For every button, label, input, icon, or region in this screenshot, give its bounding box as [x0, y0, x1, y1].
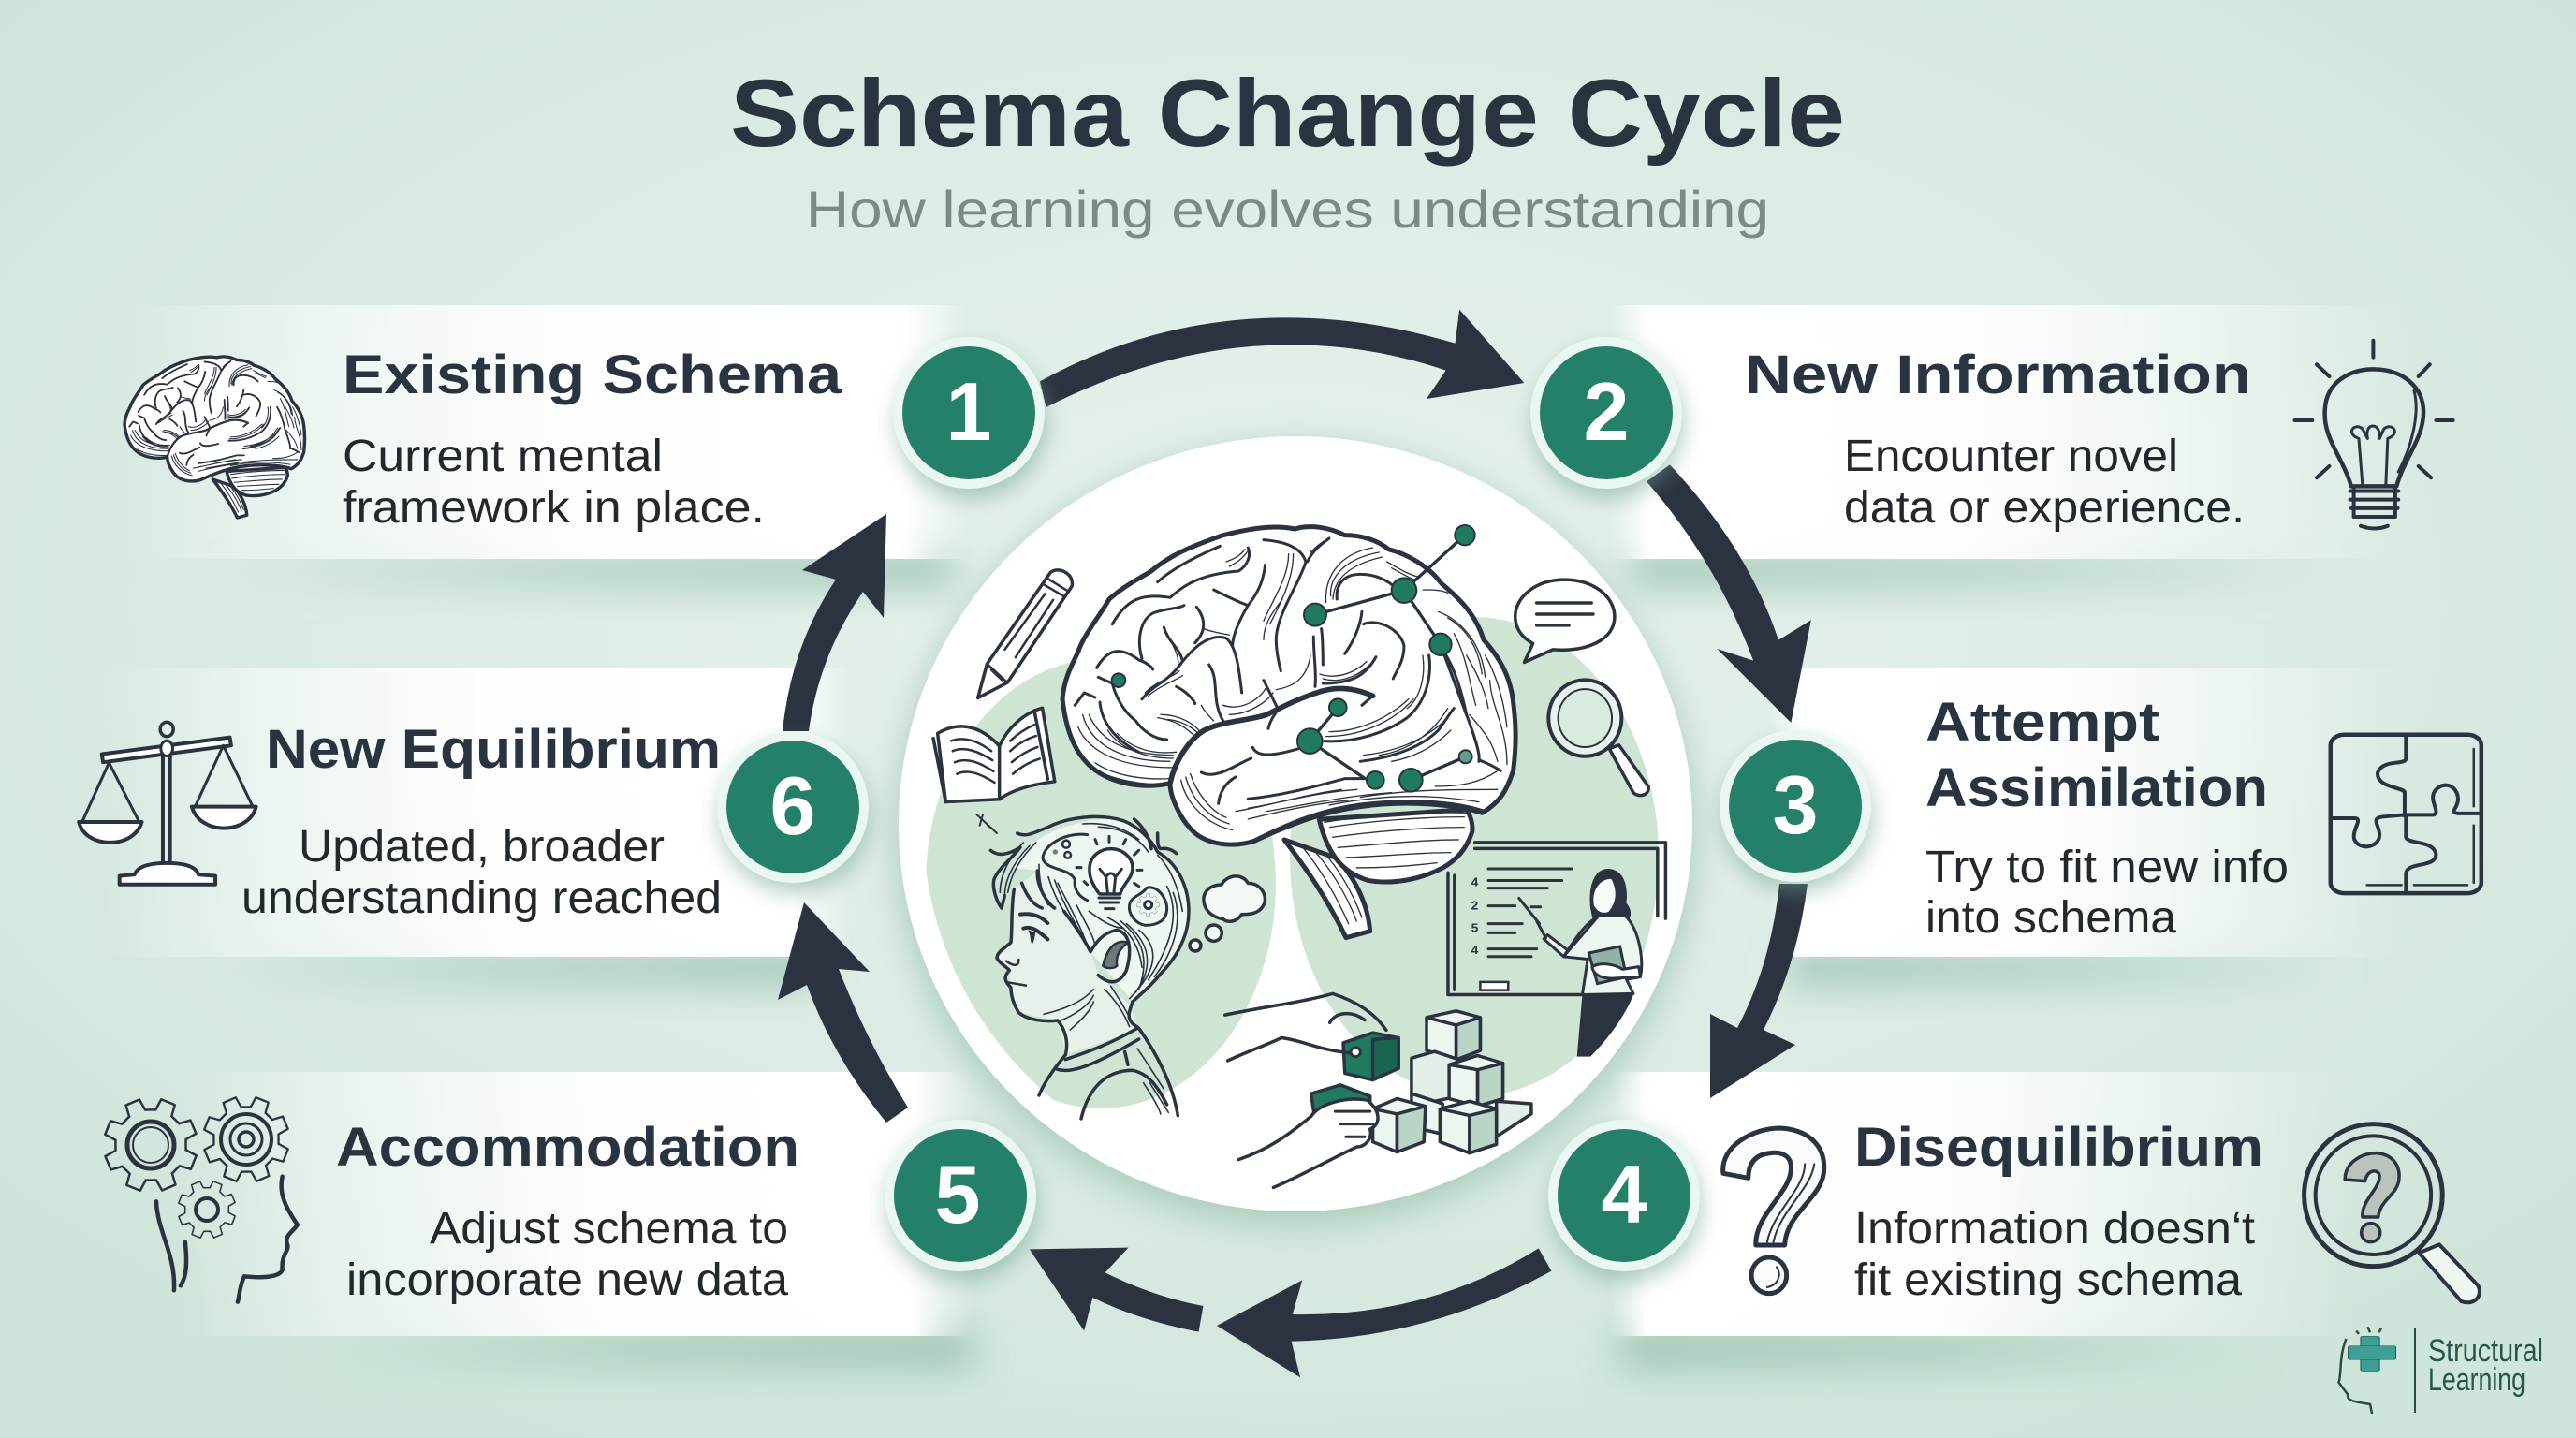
panel text: attempt assimilation: into schema — [1925, 893, 2176, 943]
panel: existing schema background — [122, 305, 969, 559]
icon: magnifier with question mark — [2305, 1124, 2480, 1302]
panel text: disequilibrium: Information doesn‘t — [1854, 1204, 2255, 1254]
panel shadows — [215, 552, 2349, 1369]
logo divider — [2414, 1328, 2416, 1413]
icon: balance scales — [79, 722, 256, 885]
logo: Structural Learning — [2338, 1327, 2543, 1414]
block stack — [1373, 1011, 1531, 1153]
icon: head with gears — [91, 1084, 301, 1302]
badge 3 — [1720, 730, 1872, 891]
panel text: attempt assimilation: Assimilation — [1925, 757, 2268, 818]
panel text: new equilibrium: New Equilibrium — [266, 719, 721, 780]
arrow: step 4 toward step 5, second segment — [1030, 1248, 1203, 1332]
illustration: teacher at whiteboard: 5 — [1471, 921, 1479, 934]
green background blobs — [926, 617, 1659, 1108]
badge 3: 3 — [1773, 758, 1818, 851]
central illustration circle — [895, 436, 1696, 1226]
hands — [1225, 993, 1386, 1061]
icon: magnifier — [1548, 680, 1648, 796]
main brain with network nodes — [1062, 525, 1515, 938]
logo wordmark: Structural — [2428, 1333, 2543, 1369]
arrow: step 6 to step 1 — [783, 514, 886, 731]
logo mark — [2338, 1327, 2396, 1414]
arrow: step 5 to step 6 — [778, 902, 908, 1123]
panel text: accommodation: Accommodation — [336, 1117, 799, 1178]
panel text: new information: data or experience. — [1844, 483, 2245, 533]
icon: thought cloud — [1190, 876, 1265, 951]
panel: attempt assimilation background — [1769, 668, 2406, 957]
panel text: attempt assimilation: Attempt — [1925, 692, 2159, 753]
panel text: new information: Encounter novel — [1844, 432, 2178, 481]
panel text: accommodation — [336, 1117, 799, 1305]
panel text: existing schema: Current mental — [343, 432, 663, 481]
badge 5: 5 — [935, 1148, 980, 1240]
panel text: disequilibrium: fit existing schema — [1854, 1255, 2242, 1305]
panel: accommodation background — [178, 1072, 973, 1336]
panel: new equilibrium background — [103, 668, 852, 957]
neural network nodes — [1112, 525, 1475, 792]
panel text: new equilibrium: understanding reached — [242, 873, 722, 923]
panel text: new equilibrium — [242, 719, 722, 923]
badge 5 — [885, 1120, 1037, 1281]
panel: new information background — [1610, 305, 2415, 559]
arrow: step 1 to step 2 — [1040, 310, 1524, 407]
panel text: new information — [1745, 345, 2251, 533]
arrow: step 3 to step 4 — [1710, 884, 1808, 1098]
badge 1: 1 — [946, 365, 991, 458]
illustration: teacher at whiteboard: 2 — [1471, 899, 1478, 912]
badge 6: 6 — [770, 759, 815, 852]
panel: disequilibrium background — [1610, 1072, 2359, 1336]
icon: brain — [124, 357, 305, 518]
panel text: existing schema: framework in place. — [343, 483, 765, 533]
green block — [1311, 1033, 1398, 1111]
badge 6 — [717, 731, 870, 892]
illustration: teacher at whiteboard — [1448, 843, 1665, 1057]
icon: light bulb — [2295, 341, 2453, 528]
panel text: accommodation: Adjust schema to — [430, 1204, 788, 1254]
badge 4: 4 — [1602, 1148, 1647, 1240]
panel text: new equilibrium: Updated, broader — [299, 822, 665, 872]
panel text: existing schema: Existing Schema — [343, 345, 842, 405]
doodles: pencil, book, speech bubble, magnifier — [933, 570, 1648, 801]
panel text: disequilibrium — [1854, 1117, 2263, 1305]
gear small — [169, 1172, 244, 1247]
illustration: child profile with ideas — [976, 814, 1265, 1119]
gear large left — [91, 1085, 211, 1205]
cycle arrows — [778, 310, 1811, 1377]
logo wordmark — [2428, 1333, 2543, 1398]
panel text: attempt assimilation — [1925, 692, 2289, 943]
icon: puzzle — [2331, 735, 2481, 893]
badge 4 — [1548, 1120, 1701, 1281]
gear upper right — [191, 1084, 301, 1195]
badge 1 — [893, 337, 1046, 498]
icon: pencil — [978, 570, 1072, 697]
panel text: accommodation: incorporate new data — [346, 1255, 788, 1305]
title: Schema Change Cycle — [730, 60, 1845, 167]
icon: open book — [933, 708, 1055, 801]
logo wordmark: Learning — [2428, 1362, 2525, 1398]
panel text: disequilibrium: Disequilibrium — [1854, 1117, 2263, 1178]
arrow: step 2 to step 3 — [1647, 464, 1811, 723]
badge 2: 2 — [1584, 365, 1629, 458]
badge 2 — [1530, 337, 1683, 498]
panel text: existing schema — [343, 345, 842, 533]
panel text: attempt assimilation: Try to fit new info — [1925, 843, 2289, 892]
icon: speech bubble — [1515, 580, 1615, 662]
arrow: step 4 toward step 5, first segment — [1217, 1248, 1551, 1377]
subtitle: How learning evolves understanding — [806, 180, 1769, 239]
illustration: teacher at whiteboard: 4 — [1471, 875, 1479, 888]
illustration: hands placing blocks — [1225, 993, 1531, 1187]
icon: question mark — [1723, 1128, 1824, 1294]
illustration: teacher at whiteboard: 4 — [1471, 943, 1479, 957]
panel text: new information: New Information — [1745, 345, 2251, 405]
